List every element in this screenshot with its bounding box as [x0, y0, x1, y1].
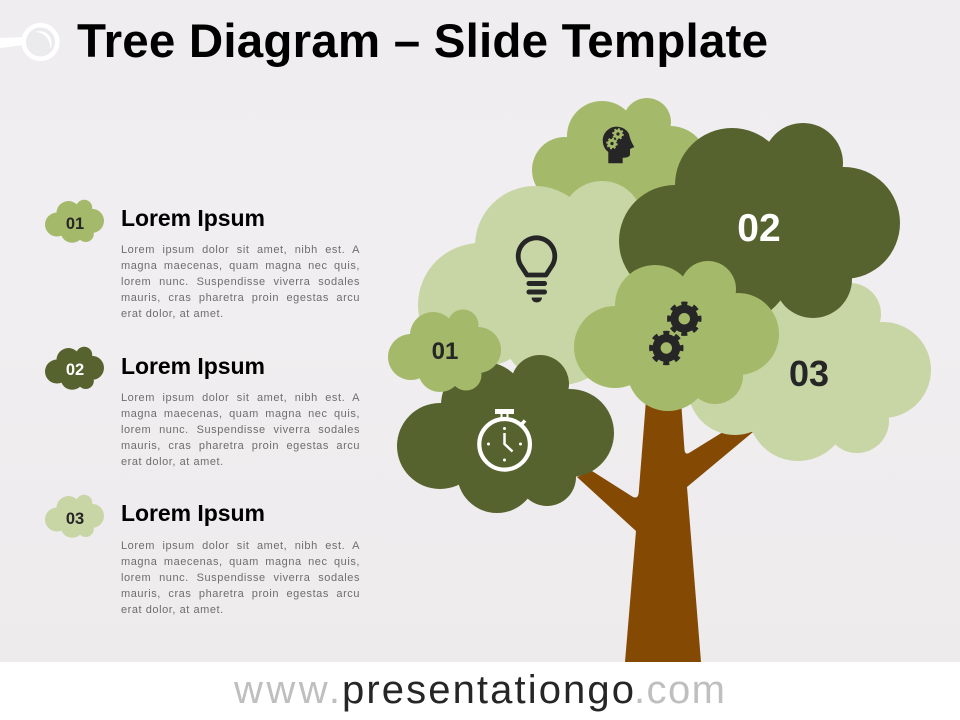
body text 03: mauris, cras pharetra proin egestas arcu	[121, 588, 360, 600]
footer website address: .com	[634, 668, 725, 712]
tree diagram	[388, 98, 931, 662]
label 02: 02	[737, 207, 781, 250]
body text 02: mauris, cras pharetra proin egestas arcu	[121, 440, 360, 452]
body text 01: lorem nunc. Suspendisse viverra sodales	[121, 276, 360, 288]
footer website address: www.	[233, 668, 340, 712]
body text 03: magna maecenas, quam magna nec quis,	[121, 556, 360, 568]
label 01: 01	[432, 338, 458, 365]
badge 01: 01	[66, 215, 84, 233]
body text 01: erat dolor, at amet.	[121, 308, 224, 320]
footer website address: presentationgo	[342, 668, 634, 712]
logo: ring pin	[0, 23, 60, 61]
panel: item 02	[45, 346, 360, 468]
body text 01: magna maecenas, quam magna nec quis,	[121, 260, 360, 272]
body text 03: lorem nunc. Suspendisse viverra sodales	[121, 572, 360, 584]
title: Tree Diagram – Slide Template	[77, 15, 768, 68]
body text 03: Lorem ipsum dolor sit amet, nibh est. A	[121, 540, 360, 552]
tree trunk and branches	[577, 400, 753, 662]
body text 02: Lorem ipsum dolor sit amet, nibh est. A	[121, 392, 360, 404]
cloud: light bulb	[418, 181, 710, 385]
body text 03	[121, 540, 360, 616]
heading 01: Lorem Ipsum	[121, 205, 265, 231]
badge 02: 02	[66, 361, 84, 379]
body text 01: mauris, cras pharetra proin egestas arcu	[121, 292, 360, 304]
panel: item 01	[45, 200, 360, 320]
body text 02: lorem nunc. Suspendisse viverra sodales	[121, 424, 360, 436]
body text 02	[121, 392, 360, 468]
cloud 02	[619, 123, 900, 323]
icon: gears	[651, 303, 700, 363]
footer website address	[233, 668, 725, 712]
cloud 01	[388, 310, 501, 392]
badge 03	[45, 494, 104, 538]
body text 01: Lorem ipsum dolor sit amet, nibh est. A	[121, 244, 360, 256]
body text 02: magna maecenas, quam magna nec quis,	[121, 408, 360, 420]
badge 02	[45, 346, 104, 390]
cloud 03	[688, 283, 931, 461]
heading 03: Lorem Ipsum	[121, 500, 265, 526]
panel: item 03	[45, 494, 360, 616]
cloud: gears	[574, 261, 779, 411]
cloud: head icon	[532, 98, 708, 220]
cloud: stopwatch	[397, 355, 614, 513]
badge 03: 03	[66, 510, 84, 528]
icon: head with gears	[603, 127, 634, 163]
body text 01	[121, 244, 360, 320]
body text 03: erat dolor, at amet.	[121, 604, 224, 616]
label 03: 03	[789, 353, 829, 394]
icon: light bulb	[518, 238, 555, 303]
icon: stopwatch	[479, 409, 530, 470]
badge 01	[45, 200, 104, 243]
heading 02: Lorem Ipsum	[121, 353, 265, 379]
body text 02: erat dolor, at amet.	[121, 456, 224, 468]
